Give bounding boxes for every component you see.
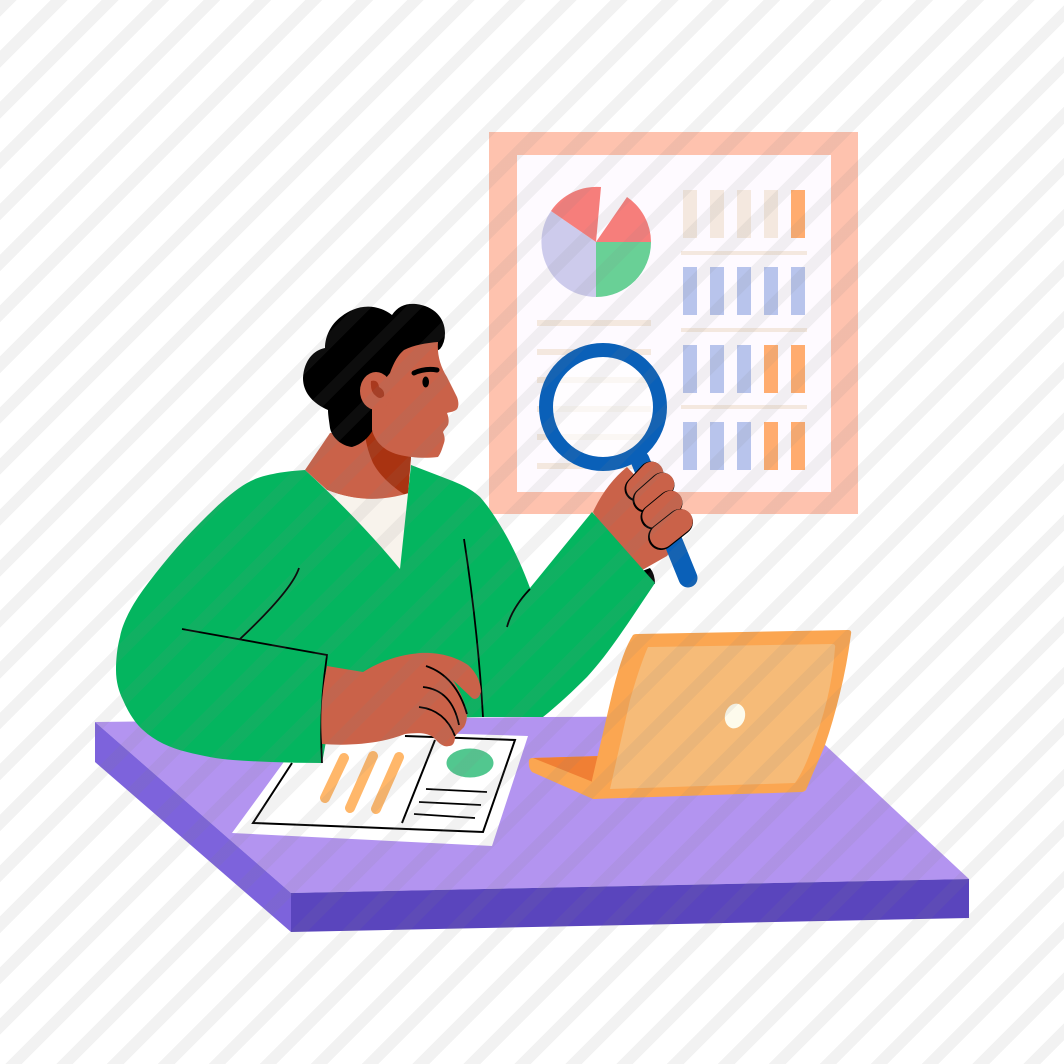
lens [551,355,655,459]
laptop [529,630,851,799]
green circle [446,748,494,778]
green jacket [116,465,655,763]
desk left side [95,722,291,932]
desk [95,716,969,932]
document on desk [232,733,528,846]
eye [422,376,429,388]
document border [253,736,515,832]
poster sheet [517,155,831,492]
neck shadow [365,430,411,495]
left text lines [537,320,651,469]
document divider [402,740,435,823]
fingers of raised hand [637,473,681,537]
laptop base [529,756,600,799]
jacket fold lines [182,539,530,763]
ear [360,372,392,410]
shirt [327,490,409,570]
hand shape [321,653,481,746]
poster frame [489,132,858,514]
bar row 4 [683,422,805,470]
face [372,342,458,458]
desk front [291,879,969,932]
left hand on document [321,653,481,746]
paper sheet [232,733,528,846]
panel: wall chart poster [489,132,858,514]
black cuff detail [637,568,655,584]
laptop lid outer [592,630,851,799]
magnifying glass [546,350,688,578]
person [116,304,688,763]
hair [303,304,445,447]
bar row 1 [683,190,805,238]
eyebrow [414,369,437,373]
row dividers [681,251,807,409]
bar row 3 [683,345,805,393]
neck [305,430,411,499]
laptop logo [722,701,748,731]
finger lines [419,666,467,736]
pie chart [541,187,651,297]
palm of raised hand [593,467,687,573]
laptop lid inner [610,644,835,789]
bar row 2 [683,267,805,315]
ring [546,350,660,464]
document text lines [414,789,487,818]
orange bars [325,756,399,809]
handle [640,460,688,578]
inner ear [371,381,384,398]
desk top [95,716,969,893]
laptop keyboard deck [533,756,600,782]
